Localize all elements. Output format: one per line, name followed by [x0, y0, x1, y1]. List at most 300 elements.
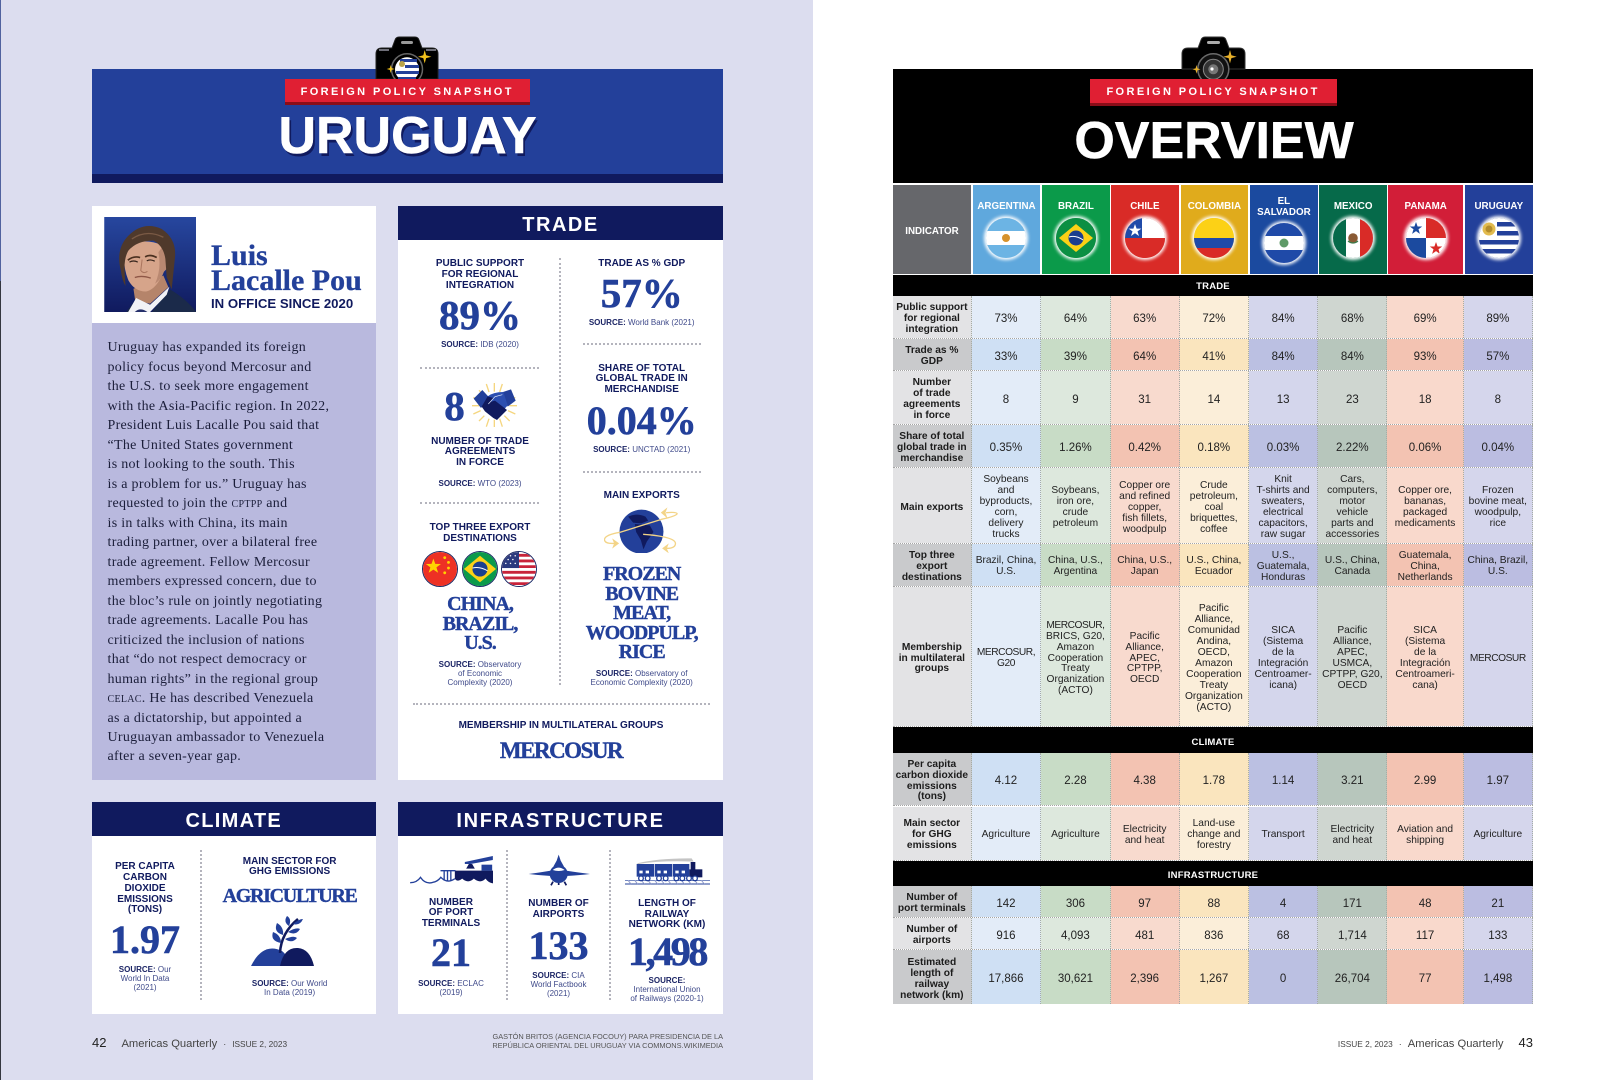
row: membership: Pacific — [1199, 603, 1229, 614]
row: carbon emissions: 4.38 — [1133, 775, 1156, 787]
stat: carbon dioxide emissions: (2021) — [133, 983, 157, 992]
row: airports: 4,093 — [1061, 930, 1090, 942]
row: membership: icana) — [1269, 680, 1297, 691]
row: membership: in multilateral — [899, 653, 965, 664]
row: membership: MERCOSUR — [1470, 653, 1526, 664]
row: main exports: Soybeans, — [1051, 485, 1100, 496]
row: port terminals: 306 — [1066, 898, 1085, 910]
row: railway length: 2,396 — [1130, 973, 1159, 985]
stat: main exports: SOURCE: Observatory of — [596, 669, 687, 678]
row: public support: 72% — [1202, 313, 1225, 325]
row: membership: Alliance, — [1125, 642, 1164, 653]
row: membership: USMCA, — [1333, 658, 1372, 669]
row: trade as % GDP — [893, 339, 1533, 371]
row: airports: 68 — [1277, 930, 1290, 942]
row: trade as % GDP: GDP — [921, 356, 943, 367]
row: share of global trade: global trade in — [897, 442, 967, 453]
stat: main exports: RICE — [619, 641, 665, 663]
row: membership: Comunidad — [1188, 625, 1240, 636]
row: export destinations: China, — [1410, 561, 1440, 572]
stat: public support — [436, 258, 524, 349]
stat: airports: SOURCE: CIA — [532, 971, 585, 980]
icon: train — [625, 858, 710, 884]
row: export destinations: China, Brazil, — [1468, 555, 1528, 566]
row: main exports: woodpulp — [1123, 524, 1166, 534]
row: trade as % GDP: 93% — [1414, 351, 1437, 363]
row: main exports: medicaments — [1395, 518, 1455, 529]
stat: share of global trade — [587, 363, 697, 454]
row: trade agreements: 31 — [1138, 394, 1151, 406]
stat: airports: (2021) — [547, 989, 570, 998]
title: Uruguay: URUGUAY — [278, 107, 537, 165]
row: airports: 133 — [1488, 930, 1507, 942]
photo credit: REPÚBLICA ORIENTAL DEL URUGUAY VIA COMMONS.WIKIMEDIA — [492, 1041, 723, 1050]
stat: railway network: LENGTH OF — [638, 898, 696, 909]
row: main exports: Copper ore, — [1398, 485, 1452, 496]
row: membership: Organization — [1185, 691, 1243, 702]
stat: main sector for GHG emissions: AGRICULTURE — [223, 885, 357, 907]
row: airports: 1,714 — [1338, 930, 1367, 942]
title: overview: OVERVIEW — [1074, 112, 1354, 170]
row: share of global trade: 0.35% — [990, 442, 1022, 454]
row: port terminals: 48 — [1419, 898, 1431, 910]
row: main sector: Main sector — [904, 818, 960, 829]
row: main exports: and refined — [1119, 491, 1170, 502]
stat: railway network: 1,498 — [628, 929, 706, 974]
stat: trade agreements — [431, 382, 529, 488]
row: membership: OECD, — [1198, 647, 1230, 658]
row: airports: Number of — [906, 924, 957, 935]
row: main exports: raw sugar — [1261, 529, 1305, 540]
row: membership — [893, 587, 1533, 727]
stat: railway network — [625, 858, 710, 1002]
row: membership: APEC, — [1129, 653, 1160, 664]
panel: infrastructure — [398, 802, 723, 1014]
photo credit: GASTÓN BRITOS (AGENCIA FOCOUY) PARA PRESIDENCIA DE LA — [492, 1032, 723, 1041]
stat: trade agreements: SOURCE: WTO (2023) — [438, 479, 521, 488]
row: trade as % GDP: 33% — [994, 351, 1018, 363]
row: carbon emissions: Per capita — [907, 759, 956, 770]
text block: foreign policy summary: criticized the inclusion of nations — [108, 633, 305, 648]
text block: foreign policy summary: after a seven-year gap. — [108, 749, 241, 764]
row: trade agreements: in force — [913, 410, 950, 421]
row: main exports: accessories — [1325, 529, 1379, 540]
stat: top export destinations: BRAZIL, — [443, 613, 517, 635]
row: main sector: emissions — [907, 840, 957, 851]
row: export destinations: Guatemala, — [1257, 561, 1309, 572]
row: membership: G20 — [997, 658, 1015, 669]
section bar: climate — [893, 727, 1533, 753]
icon: camera with lens — [1182, 36, 1246, 79]
text block: foreign policy summary: requested to join the CPTPP and — [108, 496, 287, 511]
row: public support — [893, 296, 1533, 339]
row: main exports: packaged — [1403, 507, 1447, 518]
stat: top export destinations: of Economic — [458, 669, 502, 678]
row: membership: Alliance, — [1333, 636, 1372, 647]
row: membership: Integración — [1258, 658, 1308, 669]
row: railway length: 0 — [1280, 973, 1286, 985]
row: export destinations: Honduras — [1261, 572, 1305, 583]
panel: climate — [92, 802, 376, 1014]
in office since: IN OFFICE SINCE 2020 — [211, 296, 353, 311]
heading: climate: CLIMATE — [186, 810, 282, 832]
row: main exports: copper, — [1128, 502, 1161, 513]
stat: public support: INTEGRATION — [446, 280, 514, 291]
row: share of global trade: merchandise — [900, 453, 963, 464]
stat: railway network: of Railways (2020-1) — [630, 994, 704, 1002]
row: main exports: bananas, — [1404, 496, 1446, 507]
text block: foreign policy summary: members expressed concern, due to — [108, 574, 317, 589]
row: trade agreements: of trade — [913, 388, 951, 399]
row: main exports: corn, — [995, 507, 1017, 518]
stat: carbon dioxide emissions: DIOXIDE — [124, 883, 166, 894]
header: indicator — [893, 185, 971, 274]
row: main exports: trucks — [992, 529, 1020, 540]
row: membership: groups — [915, 663, 949, 674]
row: share of global trade — [893, 425, 1533, 468]
header: El Salvador — [1250, 185, 1318, 274]
stat: share of global trade: GLOBAL TRADE IN — [596, 373, 688, 384]
row: main exports: and — [997, 485, 1014, 496]
row: port terminals: 97 — [1138, 898, 1151, 910]
row: trade agreements: agreements — [903, 399, 960, 410]
row: trade as % GDP: 57% — [1486, 351, 1509, 363]
row: export destinations: Brazil, China, — [976, 555, 1036, 566]
row: main exports: crude — [1063, 507, 1088, 518]
text block: foreign policy summary — [108, 340, 329, 764]
row: main exports: petroleum — [1053, 518, 1098, 529]
row: main exports: petroleum, — [1190, 491, 1238, 502]
photo credit — [492, 1032, 723, 1050]
row: main sector: and heat — [1125, 835, 1164, 846]
section bar: trade: TRADE — [1196, 281, 1230, 292]
stat: airports: World Factbook — [531, 980, 586, 989]
stat: railway network: NETWORK (KM) — [629, 919, 705, 930]
profile header background — [92, 206, 376, 323]
row: membership: MERCOSUR, — [1046, 620, 1105, 631]
stat: airports: NUMBER OF — [528, 898, 589, 909]
row: share of global trade: 0.03% — [1267, 442, 1299, 454]
row: main sector: Agriculture — [1051, 829, 1100, 840]
stat: share of global trade: 0.04% — [587, 398, 697, 443]
row: export destinations: destinations — [902, 572, 962, 583]
panel: trade — [398, 206, 723, 780]
row: main sector: shipping — [1406, 835, 1444, 846]
row: main exports — [893, 468, 1533, 544]
row: main exports: rice — [1490, 518, 1506, 529]
name: Luis Lacalle Pou: Luis — [211, 239, 268, 272]
stat: top export destinations — [422, 522, 537, 687]
row: main exports: Knit — [1274, 474, 1292, 485]
stat: public support: 89% — [439, 292, 521, 338]
stat: railway network: RAILWAY — [645, 909, 689, 920]
row: export destinations: China, U.S., — [1048, 555, 1103, 566]
header: Argentina — [973, 185, 1040, 274]
row: airports: 117 — [1416, 930, 1434, 942]
row: main exports: sweaters, — [1261, 496, 1305, 507]
row: membership: Amazon — [1057, 642, 1094, 653]
page edge line — [0, 0, 1, 1080]
row: main sector: Land-use — [1193, 818, 1235, 829]
stat: membership in multilateral groups: MEMBERSHIP IN MULTILATERAL GROUPS — [459, 720, 663, 731]
row: trade agreements: 18 — [1419, 394, 1431, 406]
text block: foreign policy summary: policy focus beyond Mercosur and — [108, 360, 312, 375]
row: public support: 84% — [1272, 313, 1295, 325]
row: membership: (Sistema — [1405, 636, 1445, 647]
row: port terminals: port terminals — [898, 903, 966, 914]
stat: carbon dioxide emissions: CARBON — [123, 872, 167, 883]
stat: carbon dioxide emissions: EMISSIONS — [117, 894, 173, 905]
row: railway length: 26,704 — [1335, 973, 1370, 985]
stat: airports: AIRPORTS — [533, 909, 584, 920]
row: membership: CPTPP, G20, — [1322, 669, 1383, 680]
row: membership: Centroameri- — [1395, 669, 1455, 680]
row: membership: SICA — [1271, 625, 1295, 636]
ribbon: foreign policy snapshot — [1090, 79, 1337, 106]
section bar: infrastructure: INFRASTRUCTURE — [1168, 870, 1258, 881]
row: trade agreements — [893, 371, 1533, 425]
row: railway length: Estimated — [907, 957, 956, 968]
row: share of global trade: 0.42% — [1128, 442, 1161, 454]
row: membership: Treaty — [1200, 680, 1228, 691]
stat: trade as % GDP: SOURCE: World Bank (2021) — [589, 318, 695, 327]
ribbon: foreign policy snapshot: FOREIGN POLICY SNAPSHOT — [1106, 86, 1320, 98]
row: port terminals: Number of — [906, 892, 957, 903]
stat: trade agreements: IN FORCE — [456, 457, 504, 468]
row: main exports: capacitors, — [1258, 518, 1308, 529]
header: Colombia: COLOMBIA — [1188, 201, 1241, 212]
row: membership: Integración — [1400, 658, 1450, 669]
row: main exports: iron ore, — [1057, 496, 1094, 507]
header: Argentina: ARGENTINA — [977, 201, 1036, 212]
stat: main sector for GHG emissions: In Data (2019) — [264, 988, 315, 997]
row: port terminals — [893, 886, 1533, 918]
stat: share of global trade: MERCHANDISE — [604, 384, 679, 395]
stat: top export destinations: TOP THREE EXPORT — [430, 522, 530, 533]
row: main exports: Crude — [1200, 480, 1228, 491]
footer: right page number and issue: ISSUE 2, 2023 · Americas Quarterly 43 — [1338, 1035, 1533, 1050]
row: export destinations: China, U.S., — [1117, 555, 1172, 566]
row: carbon emissions: 2.28 — [1064, 775, 1087, 787]
row: trade as % GDP: 41% — [1202, 351, 1225, 363]
row: public support: 89% — [1486, 313, 1509, 325]
row: main exports: Frozen — [1482, 485, 1514, 496]
panel: left page background — [0, 0, 813, 1080]
row: membership: Andina, — [1197, 636, 1231, 647]
section bar: infrastructure — [893, 861, 1533, 886]
stat: membership in multilateral groups — [459, 720, 663, 763]
row: railway length — [893, 950, 1533, 1004]
row: membership: Centroamer- — [1254, 669, 1312, 680]
row: main sector: Electricity — [1331, 824, 1374, 835]
photo: Luis Lacalle Pou — [104, 217, 196, 312]
row: airports: 916 — [996, 930, 1016, 942]
row: main sector: Agriculture — [982, 829, 1030, 840]
stat: top export destinations: U.S. — [464, 632, 496, 654]
row: carbon emissions: emissions — [907, 781, 957, 792]
stat: main exports: WOODPULP, — [586, 622, 698, 644]
icon: camera with Uruguay flag lens — [376, 36, 438, 79]
icon: handshake — [472, 383, 517, 427]
header: Brazil — [1042, 185, 1110, 274]
header: Uruguay: URUGUAY — [1474, 201, 1523, 212]
row: main exports: Main exports — [900, 502, 963, 513]
row: export destinations: U.S., China, — [1325, 555, 1380, 566]
row: main exports: delivery — [988, 518, 1024, 529]
row: trade as % GDP: 84% — [1341, 351, 1364, 363]
stat: port terminals: NUMBER — [429, 897, 473, 908]
row: membership: Alliance, — [1195, 614, 1233, 625]
stat: carbon dioxide emissions: (TONS) — [128, 904, 162, 915]
stat: main sector for GHG emissions: MAIN SECTOR FOR — [243, 856, 336, 867]
stat: trade agreements: NUMBER OF TRADE — [431, 436, 529, 447]
stat: main exports: MAIN EXPORTS — [604, 490, 680, 501]
row: main exports: vehicle — [1336, 507, 1368, 518]
row: main exports: woodpulp, — [1475, 507, 1521, 518]
stat: main sector for GHG emissions — [222, 856, 357, 997]
row: main exports: byproducts, — [980, 496, 1032, 507]
header: El Salvador: EL — [1278, 196, 1290, 206]
row: export destinations: U.S., China, — [1186, 555, 1241, 566]
row: membership: (ACTO) — [1058, 685, 1093, 696]
stat: port terminals: (2019) — [439, 988, 463, 996]
row: export destinations: U.S. — [996, 566, 1016, 577]
row: main exports: bovine meat, — [1469, 496, 1527, 507]
section bar: climate: CLIMATE — [1192, 737, 1234, 748]
row: main exports: electrical — [1263, 507, 1303, 518]
row: export destinations: U.S., — [1272, 550, 1294, 561]
row: trade as % GDP: 39% — [1064, 351, 1087, 363]
text block: foreign policy summary: trading partner, over a bilateral free — [108, 535, 317, 550]
icon: cargo ship — [410, 856, 493, 884]
row: airports — [893, 918, 1533, 950]
row: carbon emissions: 2.99 — [1414, 775, 1436, 787]
row: main sector: Electricity — [1123, 824, 1166, 835]
row: export destinations: export — [916, 561, 947, 572]
row: export destinations: U.S. — [1488, 566, 1508, 577]
row: main exports: parts and — [1331, 518, 1374, 529]
row: membership: Cooperation — [1048, 653, 1103, 664]
text block: foreign policy summary: trade agreement. Fellow Mercosur — [108, 555, 310, 570]
text block: foreign policy summary: CELAC. He has described Venezuela — [108, 691, 314, 706]
stat: port terminals: TERMINALS — [422, 918, 480, 929]
row: main exports: coffee — [1200, 524, 1228, 534]
stat: airports: 133 — [528, 923, 588, 968]
stat: top export destinations: SOURCE: Observatory — [439, 660, 521, 669]
stat: main exports: FROZEN — [603, 563, 680, 585]
row: airports: airports — [913, 935, 951, 946]
row: airports: 481 — [1135, 930, 1154, 942]
row: share of global trade: 0.18% — [1198, 442, 1230, 454]
row: main exports: computers, — [1327, 485, 1378, 496]
row: main sector: Transport — [1261, 829, 1305, 840]
stat: trade agreements: 8 — [444, 382, 465, 428]
header: Chile: CHILE — [1130, 201, 1160, 212]
text block: foreign policy summary: President Luis Lacalle Pou said that — [108, 418, 319, 433]
header: indicator: INDICATOR — [905, 226, 959, 236]
row: share of global trade: 0.06% — [1409, 442, 1441, 454]
row: port terminals: 88 — [1207, 898, 1220, 910]
row: membership: MERCOSUR, — [977, 647, 1035, 658]
stat: railway network: SOURCE: — [649, 976, 685, 984]
stat: carbon dioxide emissions: World In Data — [121, 974, 169, 983]
row: export destinations: Japan — [1131, 566, 1159, 577]
row: railway length: network (km) — [900, 990, 964, 1001]
stat: carbon dioxide emissions: PER CAPITA — [115, 861, 175, 872]
stat: trade as % GDP: 57% — [601, 270, 683, 316]
row: membership: de la — [1414, 647, 1436, 658]
row: membership: de la — [1272, 647, 1294, 658]
row: main sector — [893, 806, 1533, 861]
heading: infrastructure — [398, 802, 723, 836]
row: trade as % GDP: 84% — [1272, 351, 1295, 363]
row: main exports: T-shirts and — [1256, 485, 1310, 496]
stat: port terminals: 21 — [431, 930, 471, 975]
text block: foreign policy summary: trade agreements. Lacalle Pou has — [108, 613, 308, 628]
row: carbon emissions: carbon dioxide — [896, 770, 968, 781]
row: port terminals: 21 — [1491, 898, 1504, 910]
row: membership: CPTPP, — [1127, 663, 1162, 674]
header: Mexico: MEXICO — [1334, 201, 1373, 212]
row: carbon emissions — [893, 753, 1533, 806]
row: membership: OECD — [1338, 680, 1367, 691]
row: membership: Amazon — [1195, 658, 1233, 669]
row: carbon emissions: 3.21 — [1341, 775, 1364, 787]
row: main exports: Copper ore — [1119, 480, 1170, 491]
icon: plant on hill — [251, 916, 314, 966]
row: export destinations — [893, 544, 1533, 587]
row: membership: Pacific — [1337, 625, 1367, 636]
row: membership: BRICS, G20, — [1046, 631, 1105, 642]
stat: top export destinations: DESTINATIONS — [443, 533, 517, 544]
stat: carbon dioxide emissions: SOURCE: Our — [119, 965, 171, 974]
row: public support: for regional — [904, 313, 960, 324]
row: membership: Treaty — [1061, 663, 1090, 674]
row: trade agreements: 23 — [1346, 394, 1359, 406]
row: membership: (Sistema — [1263, 636, 1303, 647]
row: main sector: forestry — [1197, 840, 1231, 851]
header: El Salvador: SALVADOR — [1257, 206, 1311, 218]
row: port terminals: 142 — [996, 898, 1016, 910]
row: export destinations: Guatemala, — [1399, 550, 1451, 561]
stat: main sector for GHG emissions: SOURCE: Our World — [252, 979, 327, 988]
row: main exports: fish fillets, — [1122, 513, 1167, 524]
row: carbon emissions: (tons) — [918, 791, 946, 802]
stat: main exports: BOVINE — [605, 583, 678, 605]
row: public support: 73% — [994, 313, 1018, 325]
header: Panama: PANAMA — [1405, 201, 1447, 212]
stat: public support: FOR REGIONAL — [442, 269, 518, 280]
header: Mexico — [1319, 185, 1387, 274]
row: trade as % GDP: 64% — [1133, 351, 1156, 363]
banner: overview — [893, 69, 1533, 183]
row: membership: (ACTO) — [1196, 702, 1231, 713]
header: Brazil: BRAZIL — [1058, 201, 1094, 212]
row: export destinations: Netherlands — [1398, 572, 1453, 583]
stat: trade agreements: AGREEMENTS — [445, 446, 515, 457]
row: public support: 63% — [1133, 313, 1156, 325]
stat: port terminals: SOURCE: ECLAC — [418, 978, 484, 988]
row: export destinations: Canada — [1334, 566, 1370, 577]
row: main sector: change and — [1187, 829, 1240, 840]
stat: airports — [528, 854, 590, 998]
text block: foreign policy summary: that “do not respect democracy or — [108, 652, 307, 667]
name: Luis Lacalle Pou: Lacalle Pou — [211, 264, 362, 296]
row: public support: integration — [906, 324, 958, 335]
stat: trade as % GDP: TRADE AS % GDP — [598, 258, 685, 269]
header: Colombia — [1180, 185, 1248, 274]
stat: main exports: Economic Complexity (2020) — [591, 678, 693, 687]
